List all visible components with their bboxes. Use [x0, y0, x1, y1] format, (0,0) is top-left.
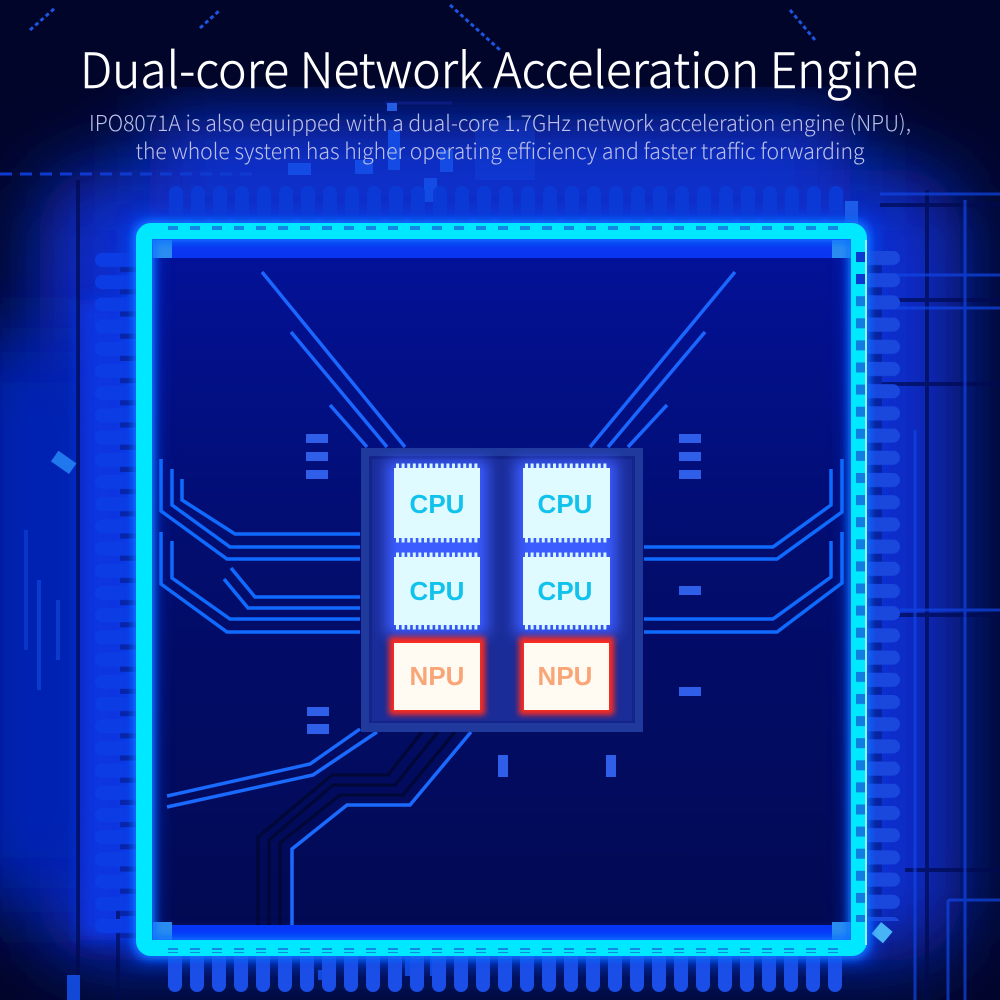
subtitle: IPO8071A is also equipped with a dual-core 1.7GHz network acceleration engine (NPU), [89, 106, 911, 138]
tile: NPU right [524, 643, 609, 710]
tile: NPU left: NPU [410, 661, 464, 691]
frame dashes: right dark top pair [856, 252, 865, 284]
title: Dual-core Network Acceleration Engine [80, 32, 918, 103]
frame dashes: right [856, 252, 865, 922]
tile: NPU left [394, 643, 480, 710]
frame dashes: bottom [168, 948, 848, 953]
traces: left bus [161, 459, 360, 632]
tile: NPU right: NPU [538, 661, 592, 691]
panel: inner die area [150, 237, 853, 943]
chip: central package [361, 448, 643, 732]
subtitle: the whole system has higher operating efficiency and faster traffic forwarding [136, 134, 865, 166]
tile: CPU middle left: CPU [410, 576, 464, 606]
frame dashes: top [168, 226, 848, 231]
glow: NPU tiles [389, 637, 614, 715]
tile: CPU middle right [523, 555, 610, 627]
small pads [306, 434, 701, 777]
chip pins: right [860, 251, 900, 921]
traces: bottom dark [258, 732, 455, 925]
chip pins: bottom [168, 950, 848, 992]
inner edge glow [150, 237, 853, 943]
glow: CPU tiles [386, 460, 617, 635]
tile: CPU middle right: CPU [538, 576, 592, 606]
subtitle [89, 106, 911, 166]
tile: CPU top left: CPU [410, 489, 464, 519]
icon: diamond pad left [51, 451, 76, 474]
traces: bottom left [167, 729, 471, 925]
tile: CPU top left [394, 466, 480, 540]
band: bottom of die [152, 925, 851, 941]
icon: diamond pad bottom right [871, 922, 893, 943]
chip body outer glow [130, 218, 873, 961]
band: top of die [152, 239, 851, 258]
chip pins: left [95, 250, 139, 940]
tile: CPU middle left [394, 555, 480, 627]
corner pad: top right [845, 201, 858, 225]
corner squares [153, 240, 851, 941]
tile: CPU top right [523, 466, 610, 540]
tile: CPU top right: CPU [538, 489, 592, 519]
traces: right bus [644, 459, 842, 632]
chip pins: top [169, 186, 849, 226]
frame: glowing border [144, 226, 867, 953]
traces: upper diagonals [262, 272, 735, 447]
